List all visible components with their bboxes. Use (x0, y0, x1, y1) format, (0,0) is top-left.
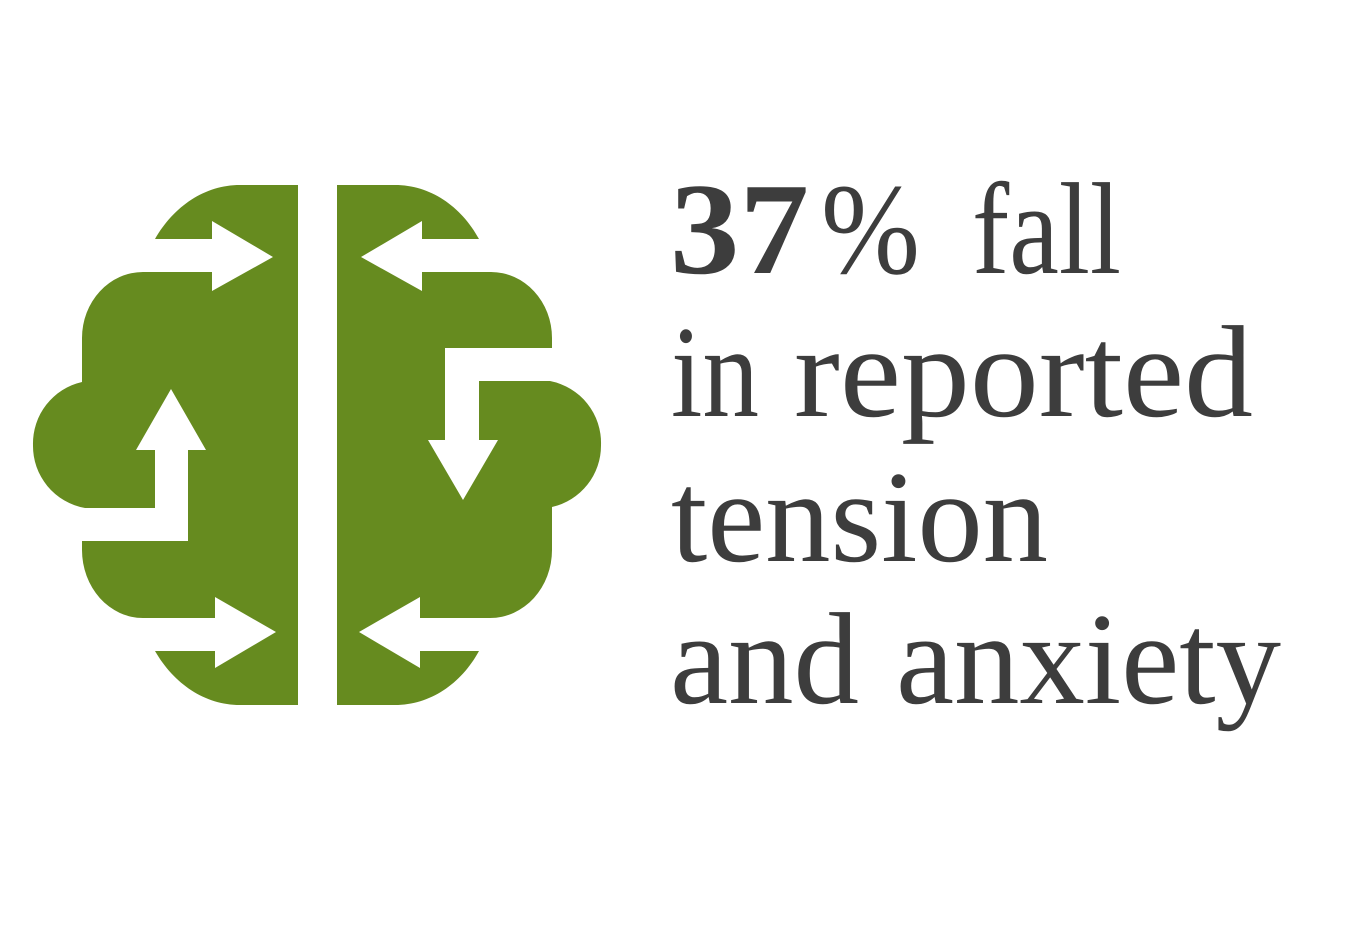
line 4 (670, 587, 1281, 732)
percent sign: % (821, 158, 920, 302)
line 1: 37% fall (670, 157, 1121, 302)
statistic: 37: 37 (670, 157, 809, 302)
word: anxiety: anxiety (896, 587, 1281, 732)
icon: green brain with arrows (33, 185, 601, 705)
word: reported: reported (794, 300, 1253, 445)
left brain hemisphere (33, 185, 298, 705)
word: in: in (671, 300, 759, 445)
right brain hemisphere (337, 185, 601, 705)
line 3: tension (671, 445, 1048, 590)
word: and: and (670, 587, 859, 732)
line 2 (671, 300, 1253, 445)
word: fall: fall (972, 157, 1121, 302)
headline text (670, 157, 1281, 732)
